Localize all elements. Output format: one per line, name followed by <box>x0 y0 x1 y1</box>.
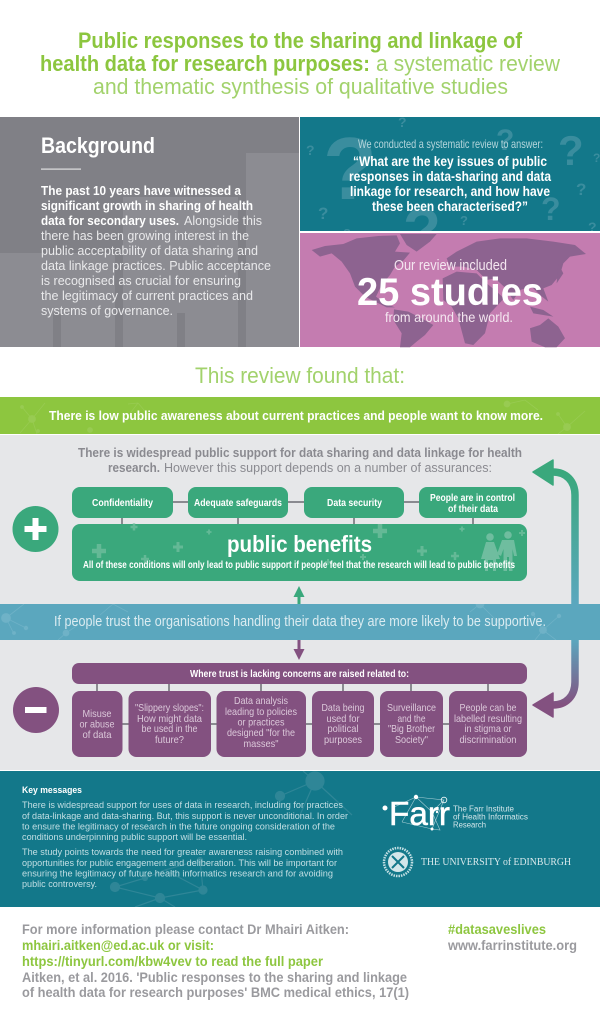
box: slippery slopes: "Slippery slopes": <box>135 702 204 714</box>
box: misuse: or abuse <box>80 718 115 730</box>
concerns heading <box>72 663 527 684</box>
panel: review question: ? <box>496 124 514 157</box>
box: labelled <box>449 691 527 757</box>
banner: low awareness <box>0 397 600 437</box>
panel: review question: ? <box>398 114 407 130</box>
key messages text: of data-linkage and data-sharing. But, this support is never unconditional. In order <box>22 811 348 822</box>
review intro: We conducted a systematic review to answer: <box>358 137 543 151</box>
box: data analysis: masses" <box>244 738 279 750</box>
world map <box>312 234 586 347</box>
footer: contact <box>22 921 409 1000</box>
box: political purposes: used for <box>326 713 360 725</box>
panel: review question: ? <box>323 119 377 218</box>
box: labelled: People can be <box>460 702 517 714</box>
background text: Alongside this <box>184 213 262 228</box>
box: surveillance: "Big Brother <box>388 723 435 735</box>
panel: public benefits <box>72 524 527 581</box>
background text: the legitimacy of current practices and <box>41 288 253 303</box>
box: surveillance: Surveillance <box>387 702 436 714</box>
footer: contact: Aitken, et al. 2016. 'Public responses to the sharing and linkage <box>22 969 407 985</box>
arrow: trust to support <box>553 472 575 604</box>
panel: background <box>0 117 299 347</box>
title: and thematic synthesis of qualitative studies <box>93 74 508 99</box>
review question quote: these been characterised?” <box>372 198 528 214</box>
footer: contact: For more information please contact Dr Mhairi Aitken: <box>22 921 349 937</box>
banner: trust <box>0 600 600 640</box>
panel: key messages <box>0 771 600 907</box>
key messages text: opportunities for public engagement and deliberation. This will be important for <box>22 858 337 869</box>
arrow: double headed <box>294 586 304 660</box>
footer: hashtag and website: www.farrinstitute.org <box>447 937 577 953</box>
support statement: research. <box>108 460 160 475</box>
box: slippery slopes: be used in the <box>142 723 198 735</box>
box: data security: Data security <box>327 497 382 509</box>
background text: data for secondary uses. <box>41 213 179 228</box>
box: labelled: discrimination <box>460 734 517 746</box>
logo: University of Edinburgh: THE UNIVERSITY of EDINBURGH <box>421 857 571 868</box>
panel: review question: ? <box>343 226 351 241</box>
panel: review question: ? <box>588 219 597 235</box>
box: people in control <box>419 487 527 518</box>
box: political purposes: Data being <box>322 702 365 714</box>
icon: plus circle <box>12 506 58 552</box>
assurances diagram <box>72 487 527 581</box>
panel: review question: ? <box>460 213 468 228</box>
background text <box>41 183 271 318</box>
box: surveillance: Society" <box>395 734 428 746</box>
concerns heading: Where trust is lacking concerns are raised related to: <box>190 668 409 680</box>
box: people in control: People are in control <box>430 492 515 504</box>
title <box>40 28 560 99</box>
key messages text: conditions underpinning public support will be essential. <box>22 832 247 843</box>
box: confidentiality: Confidentiality <box>92 497 153 509</box>
box: misuse <box>72 691 122 757</box>
footer: hashtag and website <box>447 921 577 953</box>
box: data analysis: or practices <box>238 716 284 728</box>
box: data security <box>304 487 404 518</box>
key messages text: public controversy. <box>22 879 97 890</box>
panel: review question: ? <box>403 197 441 266</box>
box: surveillance: and the <box>398 713 426 725</box>
footer: contact: mhairi.aitken@ed.ac.uk or visit: <box>22 937 214 953</box>
box: misuse: Misuse <box>82 708 112 720</box>
background heading: Background <box>41 133 155 158</box>
box: labelled: labelled resulting <box>454 713 522 725</box>
box: slippery slopes <box>128 691 211 757</box>
background text: data linkage practices. Public acceptance <box>41 258 271 273</box>
panel: review question: ? <box>306 142 315 158</box>
key messages text: There is widespread support for uses of data in research, including for practices <box>22 800 343 811</box>
box: political purposes: political <box>328 723 358 735</box>
review question quote <box>349 153 551 214</box>
findings heading: This review found that: <box>195 363 405 388</box>
box: adequate safeguards <box>188 487 288 518</box>
box: data analysis: designed "for the <box>227 727 295 739</box>
footer: contact: https://tinyurl.com/kbw4vev to read the full paper <box>22 953 323 969</box>
review question quote: responses in data-sharing and data <box>349 168 551 184</box>
panel: studies with world map: from around the world. <box>385 309 513 325</box>
arrow: trust to concerns <box>553 640 575 705</box>
concerns diagram <box>72 663 527 757</box>
background text: is recognised as crucial for ensuring <box>41 273 241 288</box>
box: surveillance <box>380 691 443 757</box>
box: slippery slopes: How might data <box>137 713 202 725</box>
support statement <box>78 445 522 475</box>
box: data analysis: leading to policies <box>225 706 297 718</box>
key messages text: The study points towards the need for greater awareness raising combined with <box>22 847 343 858</box>
box: people in control: of their data <box>448 503 498 515</box>
box: confidentiality <box>72 487 173 518</box>
studies count: Our review included <box>394 257 507 274</box>
box: misuse: of data <box>82 729 112 741</box>
title: a systematic review <box>376 51 560 76</box>
logo: Farr Institute: Research <box>453 820 486 830</box>
box: adequate safeguards: Adequate safeguards <box>194 497 282 509</box>
panel: review question: ? <box>318 204 328 223</box>
public benefits heading: public benefits <box>227 531 372 557</box>
key messages text: ensuring the legitimacy of future health informatics research and for avoiding <box>22 868 333 880</box>
footer: contact: of health data for research purposes' BMC medical ethics, 17(1) <box>22 984 409 1000</box>
key messages text <box>22 800 348 890</box>
background text: there has been growing interest in the <box>41 228 249 243</box>
logo: University of Edinburgh <box>384 848 571 876</box>
background text: significant growth in sharing of health <box>41 198 253 213</box>
key messages text: to ensure the legitimacy of research in the future ongoing consideration of the <box>22 822 335 832</box>
panel: studies with world map: 25 studies <box>357 271 543 314</box>
panel: review question: ? <box>576 180 586 199</box>
title: health data for research purposes: <box>40 51 370 76</box>
panel: review question: ? <box>541 191 561 227</box>
box: political purposes: purposes <box>324 734 362 746</box>
icon: people <box>481 531 517 571</box>
icon: minus circle <box>13 687 59 733</box>
box: political purposes <box>312 691 374 757</box>
box: slippery slopes: future? <box>155 734 184 746</box>
panel: review question <box>300 114 600 266</box>
logo: Farr Institute: Farr <box>389 795 450 832</box>
support statement: However this support depends on a number of assurances: <box>164 460 492 475</box>
box: labelled: in stigma or <box>464 723 512 735</box>
banner: low awareness: There is low public awareness about current practices and people want to know more. <box>49 408 543 423</box>
background text: systems of governance. <box>41 303 173 318</box>
arrow head: top <box>533 460 553 485</box>
background text: The past 10 years have witnessed a <box>41 183 242 198</box>
logo: Farr Institute: of Health Informatics <box>453 812 528 822</box>
panel: studies with world map <box>300 233 600 347</box>
box: data analysis: Data analysis <box>234 695 288 707</box>
logo: Farr Institute: The Farr Institute <box>453 804 515 814</box>
background text: public acceptability of data sharing and <box>41 243 258 258</box>
review question quote: “What are the key issues of public <box>353 153 547 169</box>
panel: findings background <box>0 435 600 770</box>
title: Public responses to the sharing and linkage of <box>78 28 523 53</box>
footer: hashtag and website: #datasaveslives <box>448 921 546 937</box>
logo: Farr Institute <box>382 795 528 832</box>
key messages heading: Key messages <box>22 785 82 796</box>
arrow head: bottom <box>533 693 553 717</box>
review question quote: linkage for research, and how have <box>350 183 550 199</box>
panel: review question: ? <box>558 127 584 174</box>
support statement: There is widespread public support for data sharing and data linkage for health <box>78 445 522 460</box>
box: data analysis <box>216 691 306 757</box>
